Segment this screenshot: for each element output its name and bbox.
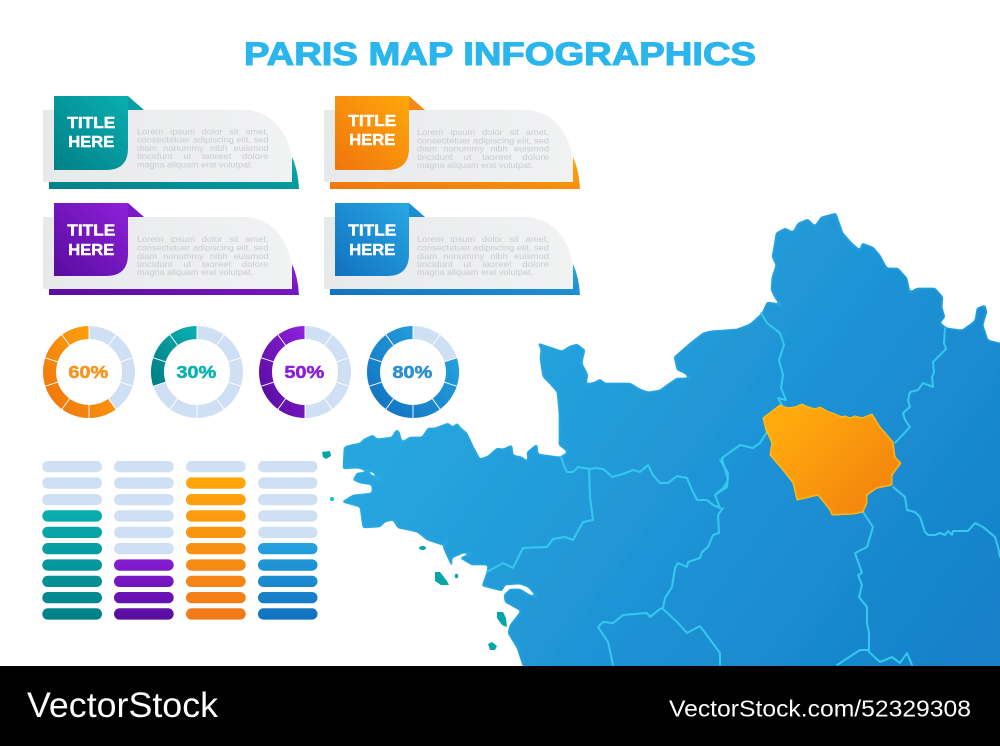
card fold	[128, 96, 144, 110]
card body text: tincidunt ut laoreet dolore	[417, 153, 549, 162]
card body text: Lorem ipsum dolor sit amet,	[137, 127, 268, 136]
bar column: orange	[186, 461, 246, 620]
card accent strip	[330, 157, 580, 189]
bar column: teal	[42, 461, 102, 620]
card body text	[137, 127, 268, 169]
mainland landmass	[342, 213, 1000, 685]
card heading	[67, 115, 115, 151]
bar column: purple	[114, 461, 174, 620]
panel: orange title card	[324, 96, 580, 189]
card heading: TITLE	[67, 222, 115, 240]
card heading: HERE	[68, 134, 114, 151]
donut chart: 30%: 30%	[176, 362, 217, 382]
card heading: TITLE	[348, 113, 396, 130]
card body text: magna aliquam erat volutpat.	[137, 268, 253, 277]
panel: blue title card	[324, 203, 580, 295]
donut chart: 60%	[45, 326, 133, 418]
card fold	[128, 203, 144, 217]
card background	[43, 110, 292, 182]
card heading: TITLE	[67, 115, 115, 132]
card body text: consectetuer adipiscing elit, sed	[137, 244, 268, 252]
card heading	[348, 113, 396, 149]
card body text: diam nonummy nibh euismod	[137, 144, 268, 153]
panel: teal title card	[43, 96, 299, 189]
card background	[324, 110, 573, 182]
card body text: Lorem ipsum dolor sit amet,	[417, 128, 549, 137]
card heading: HERE	[349, 242, 395, 259]
card heading	[348, 222, 396, 259]
card body text	[137, 235, 268, 277]
card body text: magna aliquam erat volutpat.	[417, 268, 533, 277]
card title tab	[54, 96, 128, 170]
card body text: Lorem ipsum dolor sit amet,	[417, 235, 549, 244]
card heading	[67, 222, 115, 259]
card title tab	[335, 203, 409, 276]
card body text	[417, 128, 549, 170]
map of northern France	[322, 213, 1000, 685]
watermark image id: VectorStock.com/52329308	[669, 696, 971, 722]
card body text: Lorem ipsum dolor sit amet,	[137, 235, 268, 244]
donut chart: 30%	[153, 326, 241, 418]
card body text: diam nonummy nibh euismod	[137, 252, 268, 261]
title: PARIS MAP INFOGRAPHICS	[244, 36, 756, 72]
card title tab	[335, 96, 409, 170]
card body text: consectetuer adipiscing elit, sed	[137, 136, 268, 145]
footer band	[0, 666, 1000, 746]
card body text: magna aliquam erat volutpat.	[417, 161, 533, 170]
card heading: HERE	[349, 132, 395, 149]
card fold	[409, 96, 425, 110]
card accent strip	[330, 264, 580, 295]
card body text: magna aliquam erat volutpat.	[137, 160, 253, 169]
bar chart: stacked pill columns	[42, 461, 318, 620]
card body text: diam nonummy nibh euismod	[417, 145, 549, 154]
card fold	[409, 203, 425, 217]
card body text: consectetuer adipiscing elit, sed	[417, 136, 549, 145]
card body text	[417, 235, 549, 277]
card body text: tincidunt ut laoreet dolore	[137, 152, 268, 161]
donut chart: 50%: 50%	[284, 362, 325, 382]
bar column: blue	[258, 461, 318, 620]
donut chart: 80%: 80%	[392, 362, 433, 382]
card body text: diam nonummy nibh euismod	[417, 252, 549, 261]
region borders	[487, 313, 1000, 665]
donut chart: 60%: 60%	[68, 362, 109, 382]
islands	[322, 451, 507, 650]
watermark logo text: VectorStock	[27, 686, 219, 725]
card accent strip	[49, 157, 299, 189]
card body text: tincidunt ut laoreet dolore	[417, 260, 549, 269]
donut chart: 50%	[261, 326, 349, 418]
card heading: HERE	[68, 242, 114, 259]
highlighted region: Ile-de-France	[763, 404, 901, 515]
card accent strip	[49, 264, 299, 295]
card heading: TITLE	[348, 222, 396, 240]
card body text: consectetuer adipiscing elit, sed	[417, 244, 549, 252]
panel: purple title card	[43, 203, 299, 295]
card background	[43, 217, 292, 289]
donut chart: 80%	[369, 326, 457, 418]
card background	[324, 217, 573, 289]
card body text: tincidunt ut laoreet dolore	[137, 260, 268, 269]
card title tab	[54, 203, 128, 276]
